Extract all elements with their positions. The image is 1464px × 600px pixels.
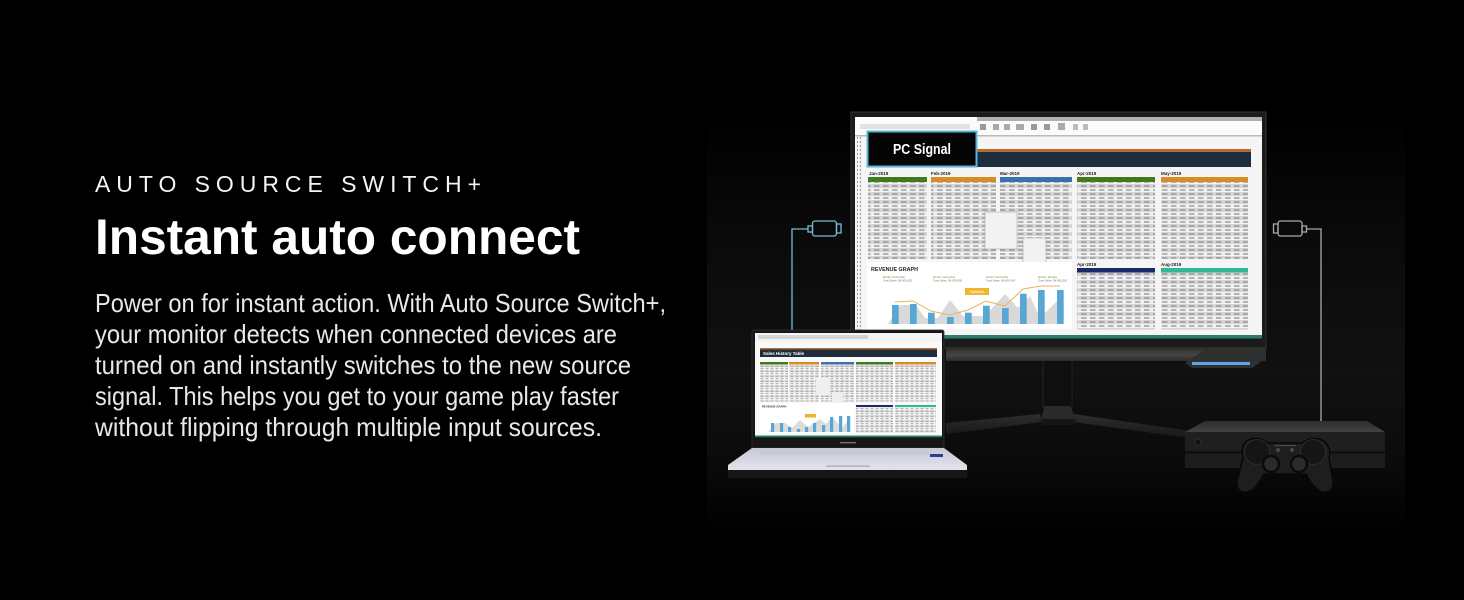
revenue graph panel: [867, 262, 1072, 329]
game controller: [1237, 439, 1333, 492]
monitor bezel: [851, 112, 1266, 348]
highlights badge: [965, 288, 989, 295]
left analog stick: [1263, 456, 1279, 472]
laptop brand label: [840, 442, 856, 443]
text block: copy: [94, 171, 666, 442]
laptop chart: [760, 403, 854, 433]
table: lower left: [1077, 262, 1155, 330]
console power button: [1195, 439, 1201, 445]
month labels: Total Sales: $4,000,000: [1038, 278, 1068, 282]
game console: [1185, 421, 1385, 468]
highlights badge: Highlights: [970, 290, 985, 294]
PC signal callout: PC Signal: [893, 142, 951, 158]
row numbers: [857, 137, 861, 333]
laptop keyboard base: [728, 448, 967, 470]
console body: [1185, 432, 1385, 452]
left d-pad: [1244, 440, 1270, 464]
month labels: Total Sales: $4,000,000: [883, 278, 913, 282]
laptop sheet title: Sales History Table: [763, 351, 805, 356]
window title bar: [977, 117, 1262, 121]
monitor screen: [855, 117, 1262, 338]
laptop chart: REVENUE GRAPH: [762, 404, 786, 408]
month labels: [883, 275, 1068, 282]
body paragraph: your monitor detects when connected devices are: [95, 319, 617, 349]
cable: laptop connection (blue): [792, 221, 841, 330]
laptop screen: [755, 333, 942, 437]
table: lower right: [1161, 262, 1248, 330]
body paragraph: [94, 288, 666, 442]
eyebrow heading: AUTO SOURCE SWITCH+: [95, 171, 481, 197]
month labels: Month: December: [883, 275, 905, 279]
right analog stick: [1291, 456, 1307, 472]
table: Apr-2019: [1077, 171, 1155, 259]
laptop sheet title: [760, 348, 937, 357]
table: lower left: Apr-2019: [1077, 262, 1097, 267]
laptop: [728, 330, 967, 478]
body paragraph: without flipping through multiple input sources.: [94, 412, 602, 442]
table: May-2019: May-2019: [1161, 171, 1182, 176]
center buttons: [1274, 445, 1296, 452]
table: Feb-2019: Feb-2019: [931, 171, 951, 176]
table: Jan-2019: Jan-2019: [869, 171, 889, 176]
body paragraph: Power on for instant action. With Auto Source Switch+,: [95, 288, 666, 318]
main heading: Instant auto connect: [95, 209, 580, 265]
monitor: [851, 112, 1266, 368]
grey area series: [888, 294, 1062, 324]
body paragraph: turned on and instantly switches to the new source: [95, 350, 631, 380]
PC signal callout: [868, 132, 976, 166]
table: lower right: Aug-2019: [1161, 262, 1182, 267]
graph heading: REVENUE GRAPH: [871, 267, 918, 273]
month labels: Month: January: [1038, 275, 1058, 279]
cable: console connection (grey): [1274, 221, 1321, 422]
month labels: Total Sales: $4,000,000: [933, 278, 963, 282]
sheet title bar: [868, 149, 1251, 167]
orange line series: [895, 286, 1060, 315]
table: Apr-2019: Apr-2019: [1077, 171, 1097, 176]
blue bar series: [892, 290, 1064, 324]
laptop lid: [752, 330, 944, 448]
monitor accent wing: [1185, 347, 1266, 368]
table: Jan-2019: [868, 171, 927, 259]
table: Feb-2019: [931, 171, 996, 259]
month labels: Month: November: [933, 275, 955, 279]
table: May-2019: [1161, 171, 1248, 259]
product image backdrop: [707, 110, 1405, 535]
monitor stand: [946, 358, 1190, 438]
laptop tables: [760, 362, 936, 433]
table: Mar-2019: [1000, 171, 1072, 259]
dialog popups: [985, 212, 1046, 268]
laptop shadow: [728, 470, 967, 478]
laptop taskbar: [755, 436, 942, 437]
body paragraph: signal. This helps you get to your game play faster: [95, 381, 619, 411]
monitor chin: [946, 347, 1266, 361]
table: Mar-2019: Mar-2019: [1000, 171, 1020, 176]
month labels: Total Sales: $4,000,000: [986, 278, 1016, 282]
console top: [1185, 421, 1385, 432]
taskbar: [855, 335, 1262, 338]
month labels: Month: December: [986, 275, 1008, 279]
right button cluster: [1300, 440, 1326, 464]
ribbon toolbar: [855, 117, 1262, 136]
